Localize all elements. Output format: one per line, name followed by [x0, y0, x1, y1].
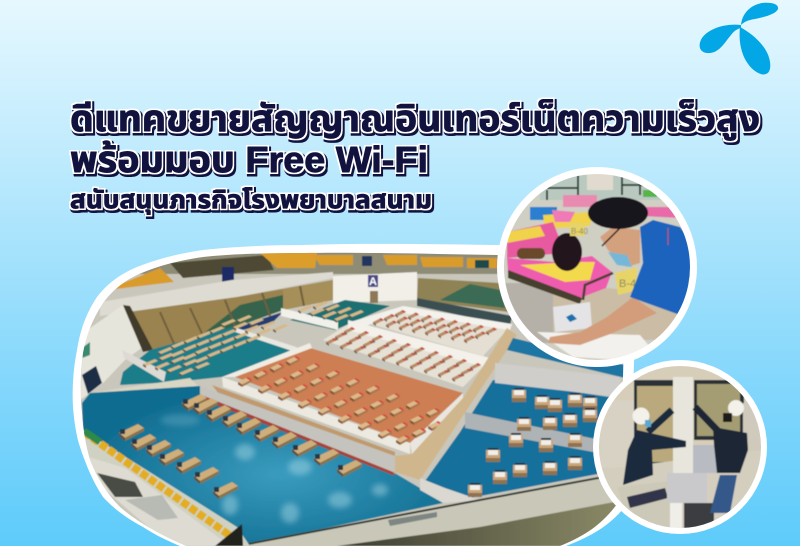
- far beds: [563, 195, 597, 207]
- back left teal floor: [120, 327, 297, 385]
- concourse white ledge: [100, 272, 333, 316]
- lower stand left: [128, 280, 333, 352]
- tan walkway strip right: [395, 328, 517, 480]
- window left: [634, 380, 675, 468]
- hair: [588, 197, 648, 229]
- upper seating: [113, 253, 497, 289]
- orange platform front wall: [222, 377, 410, 454]
- beds middle platform: [326, 327, 481, 382]
- table: [537, 332, 650, 360]
- beds back left: [143, 301, 364, 377]
- beds upper platform: [373, 310, 497, 344]
- right wall: [743, 403, 761, 451]
- circle frame: [497, 167, 697, 367]
- window right: [694, 380, 744, 440]
- glasses: [602, 228, 620, 246]
- white partitions right: [495, 363, 620, 397]
- left wall: [80, 305, 143, 400]
- title line 2: พร้อมมอบ Free Wi-Fi: [70, 139, 428, 180]
- bed sign far: B-40: [571, 227, 588, 236]
- outside left: [600, 400, 634, 468]
- room wall: [598, 365, 763, 530]
- photo white frame: [73, 244, 640, 546]
- back right teal floor with beds: [417, 298, 512, 326]
- left bed: [507, 222, 560, 258]
- left wall dark poster: [82, 366, 102, 394]
- mask: [608, 252, 632, 267]
- pale walkway: [90, 378, 200, 395]
- circle frame: [593, 360, 767, 534]
- yellow seat strip: [84, 432, 236, 540]
- shirt: [630, 220, 692, 315]
- floor: [505, 283, 555, 343]
- title line 1: ดีแทคขยายสัญญาณอินเทอร์เน็ตความเร็วสูง: [70, 98, 760, 140]
- white wall with A sign: A: [369, 276, 377, 288]
- orange platform: [235, 348, 463, 443]
- white wall with A sign: [333, 272, 417, 303]
- floor: [600, 450, 760, 530]
- man right: [695, 400, 748, 513]
- beds on orange platform: [238, 356, 458, 445]
- back center teal floor: [290, 300, 390, 330]
- room background: [504, 174, 684, 360]
- near bed: [507, 256, 612, 298]
- hall interior: [80, 250, 630, 546]
- right stand: [417, 278, 517, 313]
- equipment: [667, 445, 718, 530]
- back wall band: [138, 252, 498, 275]
- windows: [540, 175, 665, 200]
- arm: [548, 297, 657, 345]
- man left: [623, 408, 686, 485]
- circle photo: engineer with router: [497, 167, 697, 367]
- front ledge: [249, 528, 324, 544]
- tan walkway strip front: [212, 385, 395, 474]
- router: [553, 302, 592, 332]
- middle white platform: [323, 323, 487, 387]
- blue floor left: [82, 386, 443, 546]
- title text: [70, 98, 760, 215]
- bed sign: B-4: [619, 278, 636, 290]
- white partition back: [281, 308, 338, 330]
- title line 3: สนับสนุนภารกิจโรงพยาบาลสนาม: [70, 186, 432, 215]
- icon: dtac logo: [700, 3, 778, 74]
- upper white platform: [372, 313, 506, 356]
- blue floor right: [425, 380, 610, 498]
- desks on right blue floor: [468, 388, 597, 497]
- bed sign: [615, 267, 637, 295]
- black pillow: [552, 233, 582, 271]
- beds on left blue floor: [119, 394, 362, 499]
- table and magazines: [617, 480, 677, 527]
- bottom left structure: [83, 430, 250, 546]
- bed sign far: [570, 223, 588, 236]
- upper concourse wall: [80, 250, 628, 546]
- partition along front: [200, 386, 395, 472]
- left panel wall: [122, 350, 166, 382]
- pillar: [673, 377, 693, 477]
- circle photo: engineers installing: [593, 360, 767, 534]
- main photo: field hospital hall: [73, 244, 640, 546]
- floor reflections: [160, 414, 388, 523]
- face: [600, 227, 640, 267]
- water below ledge: [337, 500, 625, 546]
